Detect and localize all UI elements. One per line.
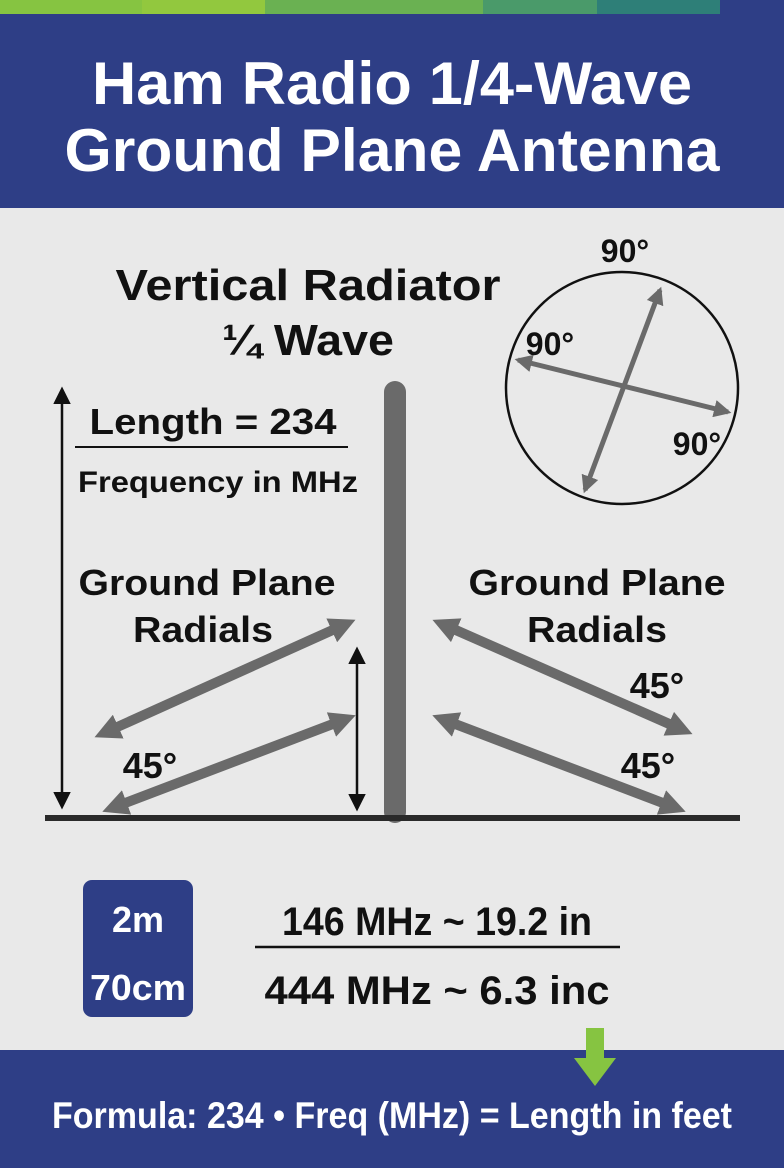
angle labels [123, 665, 684, 786]
band box: 70cm [90, 967, 186, 1008]
label: right radials [468, 562, 726, 650]
circle diagram: 90° [673, 426, 721, 462]
footer band [0, 1050, 784, 1168]
label: left radials [78, 562, 336, 650]
vertical radiator [384, 392, 406, 812]
arrow: height [61, 390, 63, 806]
circle diagram: 90° [526, 326, 574, 362]
label: right radials: Radials [527, 609, 667, 650]
formula fraction [75, 401, 358, 499]
band lengths: 444 MHz ~ 6.3 inc [264, 969, 610, 1013]
circle diagram: 90° [601, 233, 649, 269]
heading: vertical radiator [116, 261, 500, 365]
radial arrows [104, 624, 683, 808]
title: Ground Plane Antenna [64, 117, 720, 184]
label: right radials: Ground Plane [468, 562, 726, 603]
angle labels: 45° [630, 665, 684, 706]
header band [0, 0, 784, 208]
band lengths: 146 MHz ~ 19.2 in [282, 900, 592, 944]
footer band: Formula: 234 • Freq (MHz) = Length in feet [52, 1095, 732, 1136]
icon: green arrow [574, 1028, 616, 1086]
label: left radials: Ground Plane [78, 562, 336, 603]
heading: vertical radiator: ¼ Wave [222, 316, 394, 365]
title: Ham Radio 1/4-Wave [92, 50, 692, 117]
angle labels: 45° [123, 745, 177, 786]
angle labels: 45° [621, 745, 675, 786]
circle diagram [506, 233, 738, 504]
band box: 2m [112, 899, 164, 940]
heading: vertical radiator: Vertical Radiator [116, 261, 500, 310]
formula fraction: Frequency in MHz [78, 466, 358, 499]
label: left radials: Radials [133, 609, 273, 650]
formula fraction: Length = 234 [90, 401, 336, 442]
title [64, 50, 720, 184]
arrow: radial height [356, 650, 358, 808]
ground line [45, 815, 740, 821]
band box [83, 880, 193, 1017]
band lengths [255, 900, 620, 1013]
